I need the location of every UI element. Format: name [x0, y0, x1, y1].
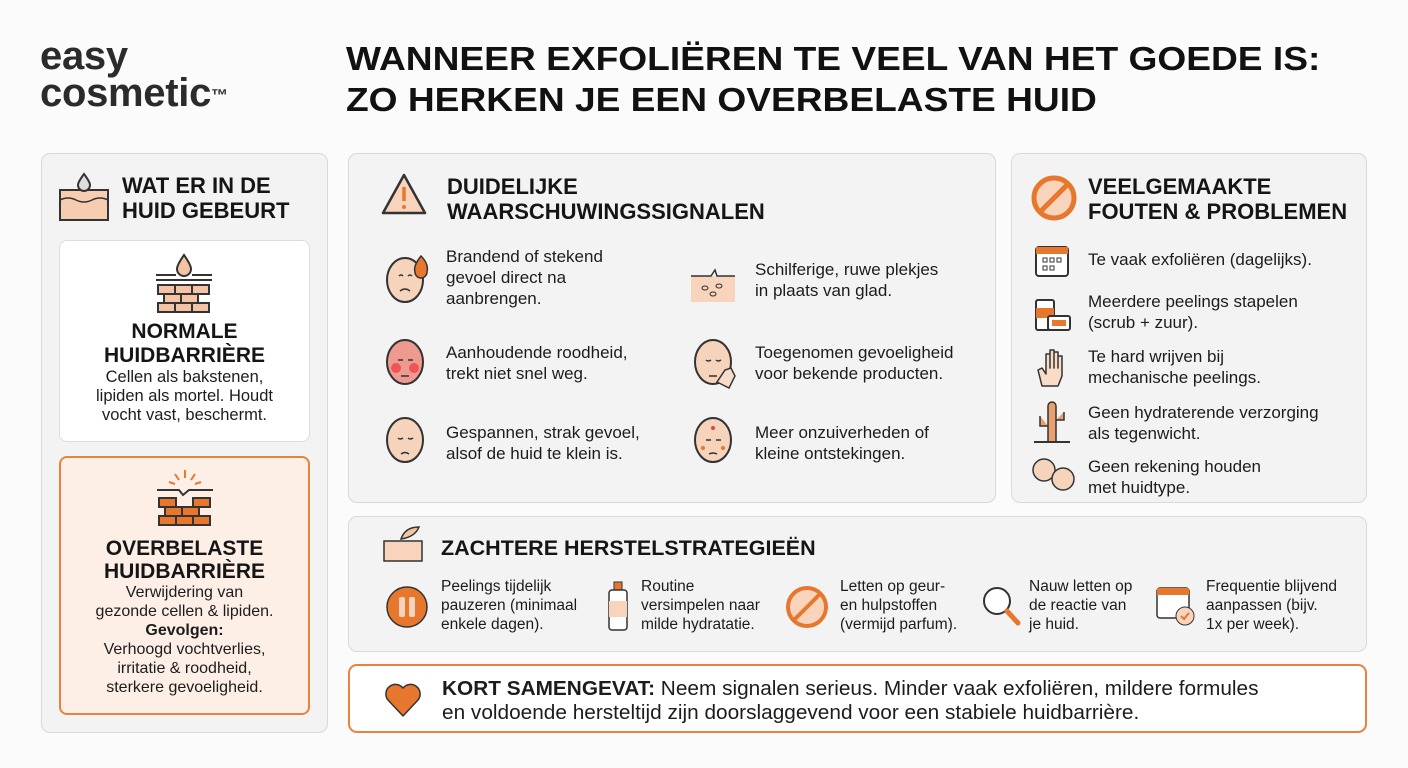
item: stapelen: [1035, 292, 1298, 332]
step: geurstoffen: en hulpstoffen: [840, 597, 937, 614]
item: huidtype: met huidtype.: [1088, 478, 1190, 497]
step: pauzeren: Peelings tijdelijk: [441, 578, 551, 595]
icon: warning triangle: [382, 174, 426, 214]
item: brandend: [386, 247, 603, 308]
card: normale huidbarriere: NORMALE: [131, 320, 238, 343]
step: geurstoffen: [786, 578, 957, 633]
heading: [1088, 174, 1347, 224]
card: normale huidbarriere: lipiden als mortel. Houdt: [96, 387, 273, 405]
heading: [447, 174, 765, 224]
step: pauzeren: [386, 578, 577, 633]
card: overbelaste huidbarriere: [59, 456, 310, 715]
item: gevoeligheid: voor bekende producten.: [755, 364, 943, 383]
card: overbelaste huidbarriere: Gevolgen:: [145, 622, 224, 639]
step: versimpelen: versimpelen naar: [641, 597, 760, 614]
item: roodheid: [386, 339, 628, 385]
heading: DUIDELIJKE: [447, 174, 578, 199]
step: frequentie: aanpassen (bijv.: [1206, 597, 1318, 614]
logo: easy: [40, 34, 128, 78]
item: huidtype: Geen rekening houden: [1088, 457, 1261, 476]
logo: cosmetic™: [40, 71, 228, 115]
item: gevoeligheid: [694, 339, 954, 389]
item: gespannen: Gespannen, strak gevoel,: [446, 423, 640, 442]
item: onzuiverheden: [694, 417, 929, 463]
step: frequentie: Frequentie blijvend: [1206, 578, 1337, 595]
heading: WAT ER IN DE: [122, 173, 271, 198]
item: te vaak: [1035, 246, 1312, 277]
item: brandend: Brandend of stekend: [446, 247, 603, 266]
step: frequentie: [1156, 578, 1337, 633]
item: huidtype: [1032, 457, 1261, 497]
icon: skin layer: [59, 172, 109, 221]
card: normale huidbarriere: Cellen als bakstenen,: [106, 368, 263, 386]
item: roodheid: trekt niet snel weg.: [446, 364, 588, 383]
card: overbelaste huidbarriere: OVERBELASTE: [106, 537, 263, 560]
step: versimpelen: milde hydratatie.: [641, 616, 755, 633]
step: reactie: Nauw letten op: [1029, 578, 1132, 595]
card: normale huidbarriere: vocht vast, beschermt.: [102, 406, 267, 424]
card: normale huidbarriere: HUIDBARRIÈRE: [104, 344, 265, 367]
summary text: KORT SAMENGEVAT: Neem signalen serieus. Minder vaak exfoliëren, mildere formules: [442, 678, 1258, 700]
step: frequentie: 1x per week).: [1206, 616, 1299, 633]
card: overbelaste huidbarriere: HUIDBARRIÈRE: [104, 560, 265, 583]
item: onzuiverheden: Meer onzuiverheden of: [755, 423, 929, 442]
step: pauzeren: enkele dagen).: [441, 616, 544, 633]
item: schilferig: [691, 260, 938, 302]
item: brandend: aanbrengen.: [446, 289, 541, 308]
card: overbelaste huidbarriere: sterkere gevoeligheid.: [106, 679, 263, 696]
step: versimpelen: Routine: [641, 578, 694, 595]
step: reactie: de reactie van: [1029, 597, 1126, 614]
card: overbelaste huidbarriere: irritatie & roodheid,: [117, 660, 252, 677]
panel: waarschuwingssignalen: [348, 153, 996, 503]
icon: damaged brick wall: [157, 470, 213, 526]
item: geen hydratatie: als tegenwicht.: [1088, 424, 1200, 443]
card: overbelaste huidbarriere: Verwijdering van: [126, 584, 243, 601]
title: WANNEER EXFOLIËREN TE VEEL VAN HET GOEDE IS:: [346, 40, 1320, 77]
heading: FOUTEN & PROBLEMEN: [1088, 199, 1347, 224]
item: gespannen: [386, 417, 640, 463]
panel: herstelstrategieen: [348, 516, 1367, 652]
step: geurstoffen: Letten op geur-: [840, 578, 945, 595]
heading: ZACHTERE HERSTELSTRATEGIEËN: [441, 536, 816, 560]
item: stapelen: (scrub + zuur).: [1088, 313, 1198, 332]
summary text: [442, 678, 1258, 724]
step: reactie: je huid.: [1029, 616, 1079, 633]
item: te hard wrijven: Te hard wrijven bij: [1088, 347, 1224, 366]
step: geurstoffen: (vermijd parfum).: [840, 616, 957, 633]
title: [346, 40, 1320, 118]
card: overbelaste huidbarriere: gezonde cellen & lipiden.: [96, 603, 273, 620]
title: ZO HERKEN JE EEN OVERBELASTE HUID: [346, 81, 1097, 118]
step: versimpelen: [608, 578, 760, 633]
icon: heart: [385, 684, 421, 717]
heading: VEELGEMAAKTE: [1088, 174, 1271, 199]
heading: [122, 173, 290, 223]
item: onzuiverheden: kleine ontstekingen.: [755, 444, 905, 463]
item: geen hydratatie: [1034, 401, 1319, 443]
item: gespannen: alsof de huid te klein is.: [446, 444, 623, 463]
item: stapelen: Meerdere peelings stapelen: [1088, 292, 1298, 311]
item: te hard wrijven: [1037, 347, 1261, 387]
icon: brick wall with drop: [156, 253, 212, 313]
summary text: en voldoende hersteltijd zijn doorslaggevend voor een stabiele huidbarrière.: [442, 702, 1139, 724]
item: te vaak: Te vaak exfoliëren (dagelijks).: [1088, 250, 1312, 269]
card: normale huidbarriere: [59, 240, 310, 442]
step: reactie: [983, 578, 1132, 633]
panel: kort samengevat: [348, 664, 1367, 733]
icon: skin with feather: [383, 526, 423, 562]
item: te hard wrijven: mechanische peelings.: [1088, 368, 1261, 387]
panel: veelgemaakte fouten: [1011, 153, 1367, 503]
item: gevoeligheid: Toegenomen gevoeligheid: [755, 343, 954, 362]
heading: WAARSCHUWINGSSIGNALEN: [447, 199, 765, 224]
panel: wat er in de huid gebeurt: [41, 153, 328, 733]
card: overbelaste huidbarriere: Verhoogd vochtverlies,: [104, 641, 265, 658]
item: brandend: gevoel direct na: [446, 268, 566, 287]
logo: [40, 34, 228, 115]
icon: prohibition sign: [1032, 176, 1076, 220]
item: geen hydratatie: Geen hydraterende verzorging: [1088, 403, 1319, 422]
heading: HUID GEBEURT: [122, 198, 289, 223]
item: schilferig: in plaats van glad.: [755, 281, 892, 300]
step: pauzeren: pauzeren (minimaal: [441, 597, 577, 614]
item: schilferig: Schilferige, ruwe plekjes: [755, 260, 938, 279]
item: roodheid: Aanhoudende roodheid,: [446, 343, 628, 362]
